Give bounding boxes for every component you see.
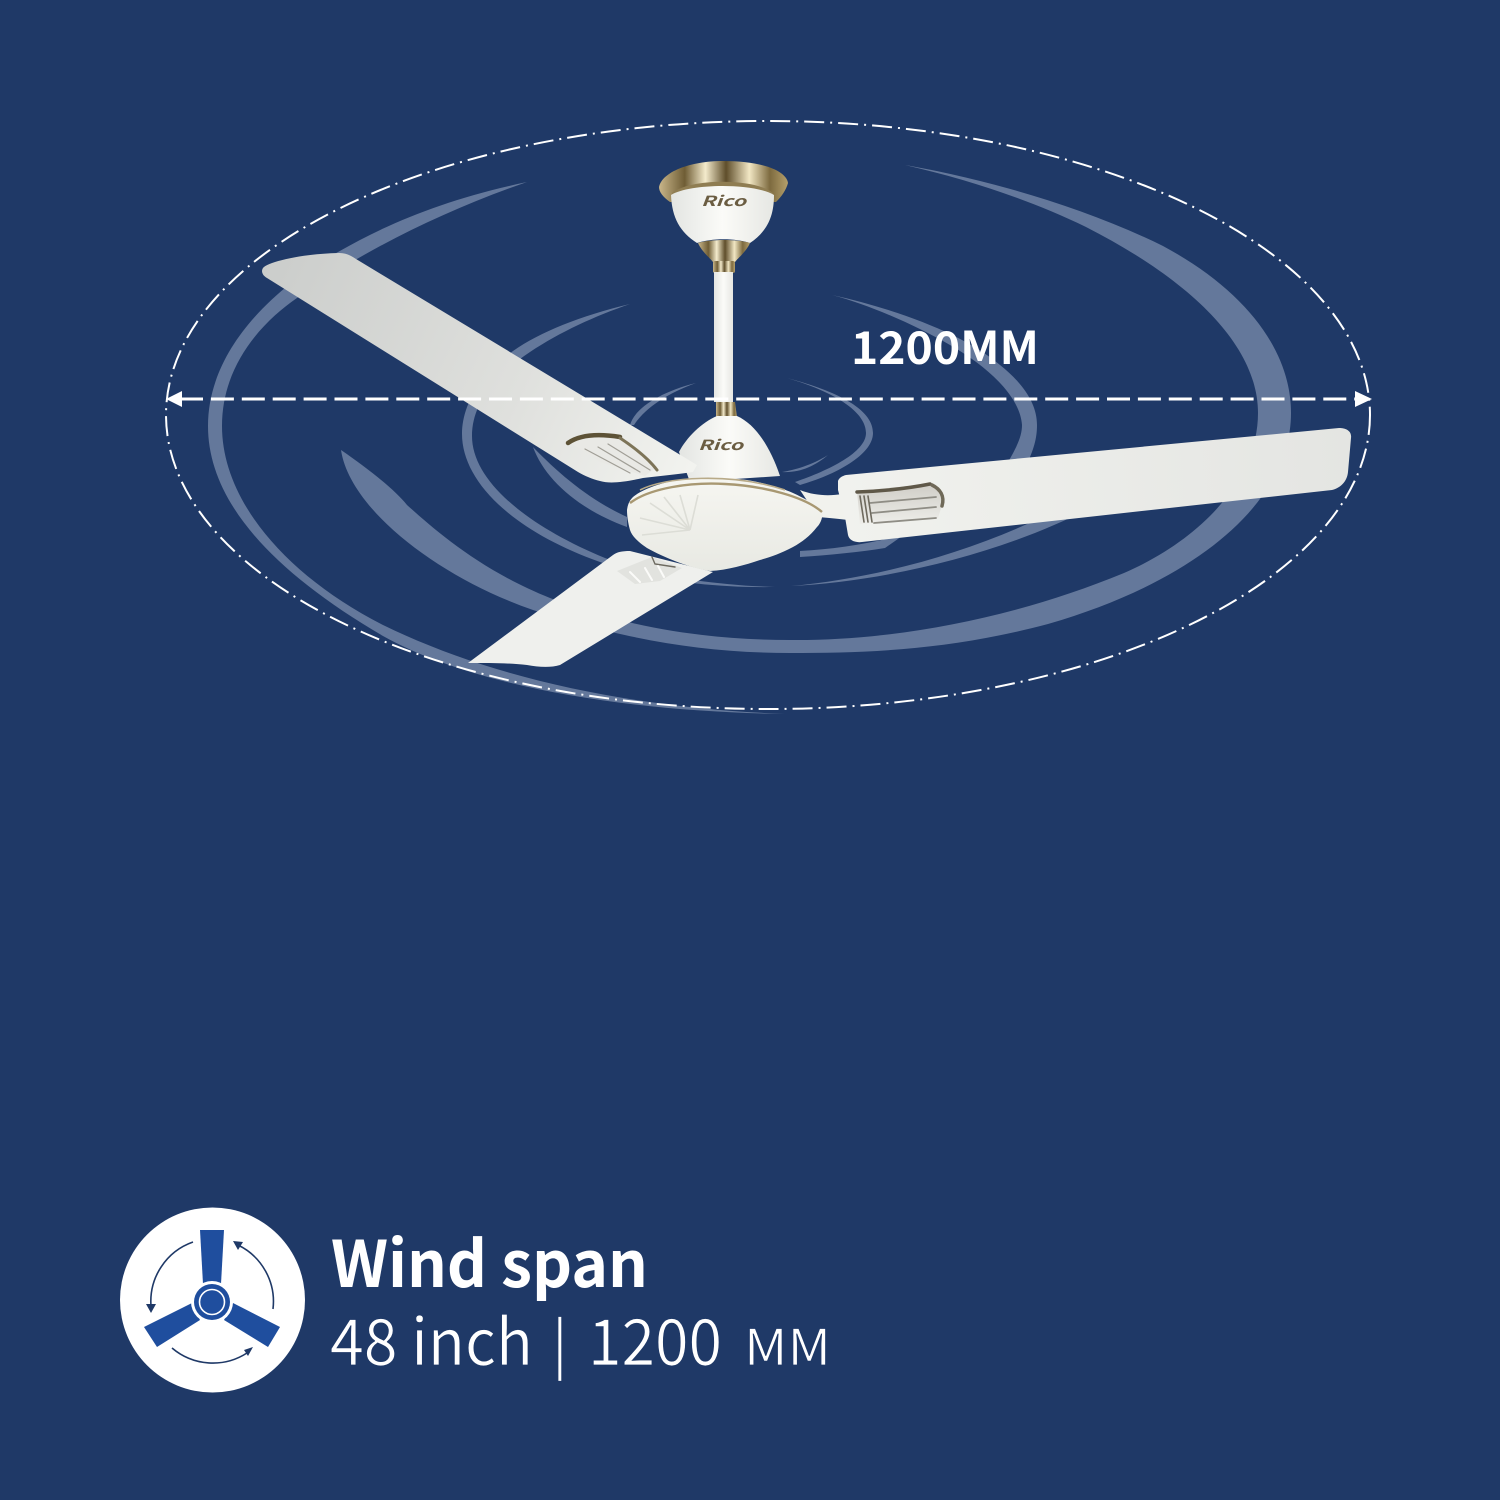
blade clip: lower [617,557,682,584]
blade clip: right [857,484,943,524]
motor dome [679,416,780,482]
ceiling fan [262,161,1351,667]
heading: Wind span [331,1214,648,1306]
upper coupling [713,261,735,273]
dimension label: 1200MM [851,312,1039,377]
canopy inner shadow [672,182,773,196]
motor lower cover [627,478,823,571]
fan blade: lower [468,551,713,667]
canopy bowl [671,186,774,243]
dash-dot sweep ellipse [166,121,1370,709]
lower coupling [716,402,737,417]
canopy logo: Rico [701,191,748,211]
cover gold trim [630,484,822,512]
arrowhead left [166,391,182,407]
icon blades [144,1230,280,1347]
canopy gold rim [659,161,788,202]
blade connector [800,490,848,520]
fan blade: upper left [262,253,697,482]
specification text: MM [744,1308,831,1380]
icon: fan in white circle [120,1208,305,1392]
canopy gold neck [698,240,750,262]
specification text: | [552,1298,568,1382]
icon rotation arrows [146,1241,273,1363]
cover upper trim [640,478,785,490]
down rod [714,272,733,402]
motor logo: Rico [698,435,745,455]
specification text [330,1292,831,1384]
cover rib pattern [640,495,698,535]
blade clip: upper left [568,433,657,476]
arrowhead right [1355,391,1372,407]
specification text: 48 inch [330,1292,533,1384]
ceiling canopy [659,161,788,273]
dimension arrow line [166,391,1372,407]
icon hub [191,1281,233,1323]
fan blade: right [838,428,1351,542]
specification text: 1200 [588,1292,722,1384]
air swirl rings [208,165,1291,714]
